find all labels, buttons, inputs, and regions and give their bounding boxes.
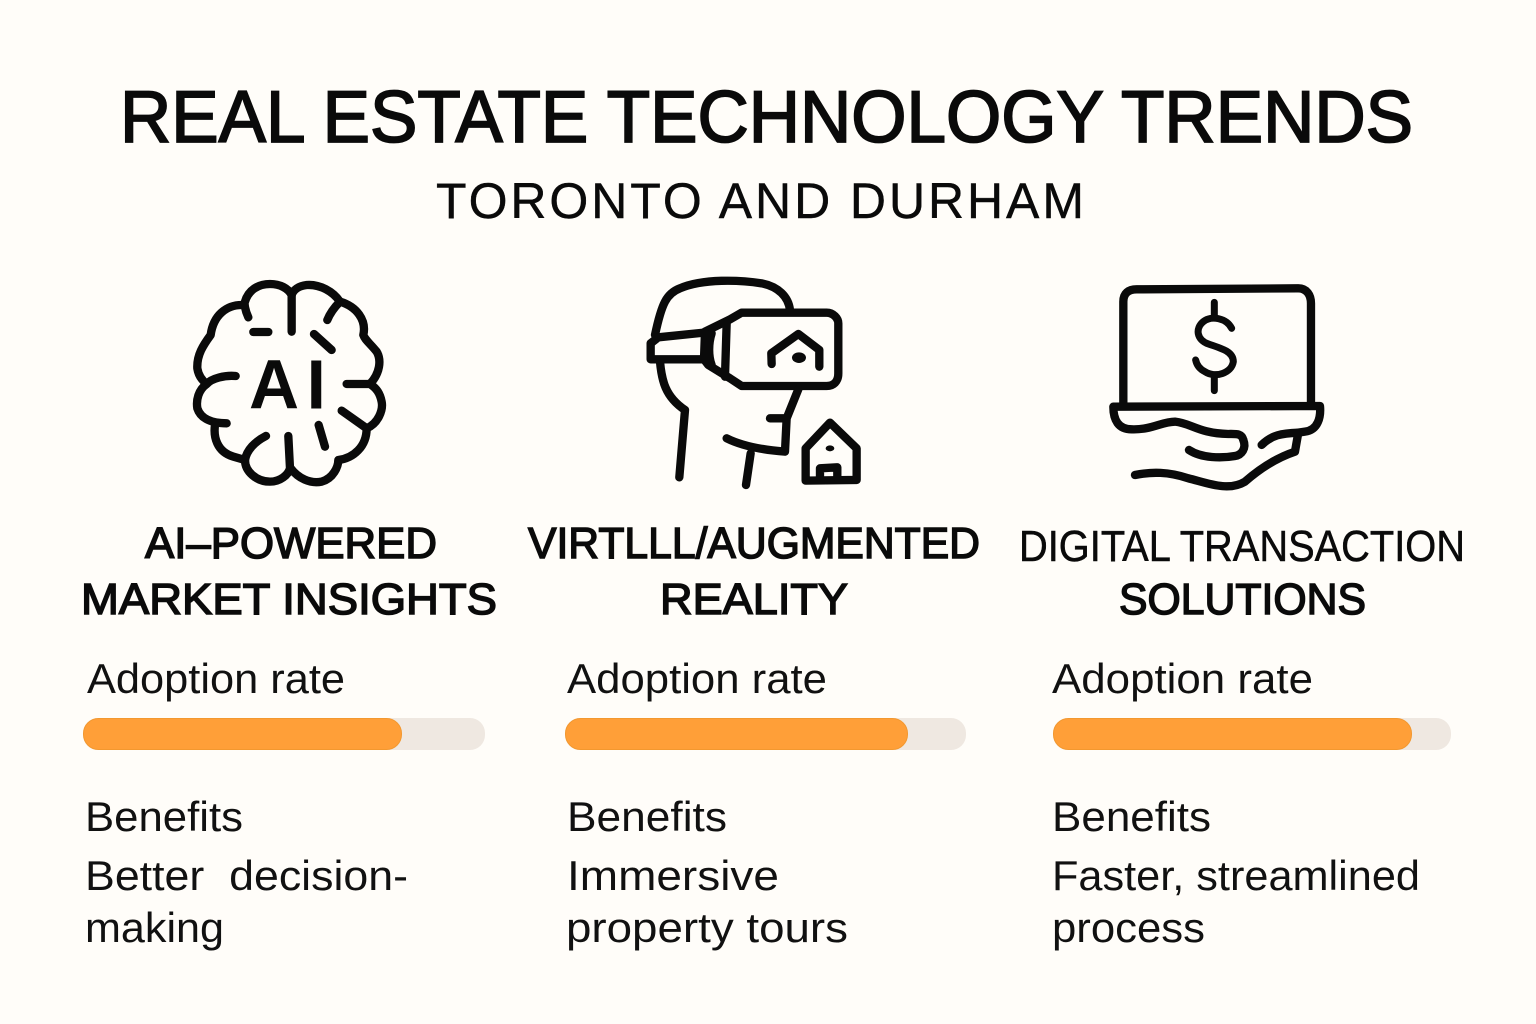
heading: market insights: MARKET INSIGHTS: [81, 575, 497, 624]
benefits text: process: [1052, 904, 1205, 951]
panel: AI-powered market insights: [81, 284, 497, 951]
adoption label: Adoption rate: [567, 655, 827, 702]
adoption label: Adoption rate: [1052, 655, 1313, 702]
heading: digital transaction: DIGITAL TRANSACTION: [1019, 522, 1465, 571]
heading: reality: REALITY: [660, 575, 848, 624]
benefits text: Better decision-: [85, 852, 408, 899]
benefits text: Benefits: [567, 793, 727, 840]
adoption bar: [83, 718, 485, 750]
benefits text: Benefits: [85, 793, 243, 840]
icon: AI brain: A: [249, 345, 299, 423]
icon: AI brain: [197, 284, 382, 482]
benefits text: making: [85, 904, 224, 951]
benefits text: [566, 793, 848, 951]
icon: laptop on hand with dollar: [1113, 288, 1320, 486]
panel: digital transaction solutions: [1019, 288, 1465, 951]
icon: VR headset with house: [651, 281, 857, 485]
title: REAL ESTATE TECHNOLOGY TRENDS: [120, 77, 1413, 158]
panel: virtual/augmented reality: [528, 281, 980, 951]
heading: solutions: SOLUTIONS: [1119, 575, 1366, 624]
benefits text: Faster, streamlined: [1052, 852, 1420, 899]
benefits text: Immersive: [567, 852, 779, 899]
benefits text: property tours: [566, 904, 848, 951]
benefits text: [1052, 793, 1420, 951]
heading: virtual/augmented: VIRTLLL/AUGMENTED: [528, 519, 980, 568]
adoption bar: [565, 718, 966, 750]
benefits text: Benefits: [1052, 793, 1211, 840]
subtitle: TORONTO AND DURHAM: [436, 173, 1084, 229]
adoption bar: [1053, 718, 1451, 750]
benefits text: [85, 793, 408, 951]
heading: AI-powered: AI–POWERED: [145, 519, 437, 568]
adoption label: Adoption rate: [87, 655, 345, 702]
icon: AI brain: I: [307, 345, 326, 423]
